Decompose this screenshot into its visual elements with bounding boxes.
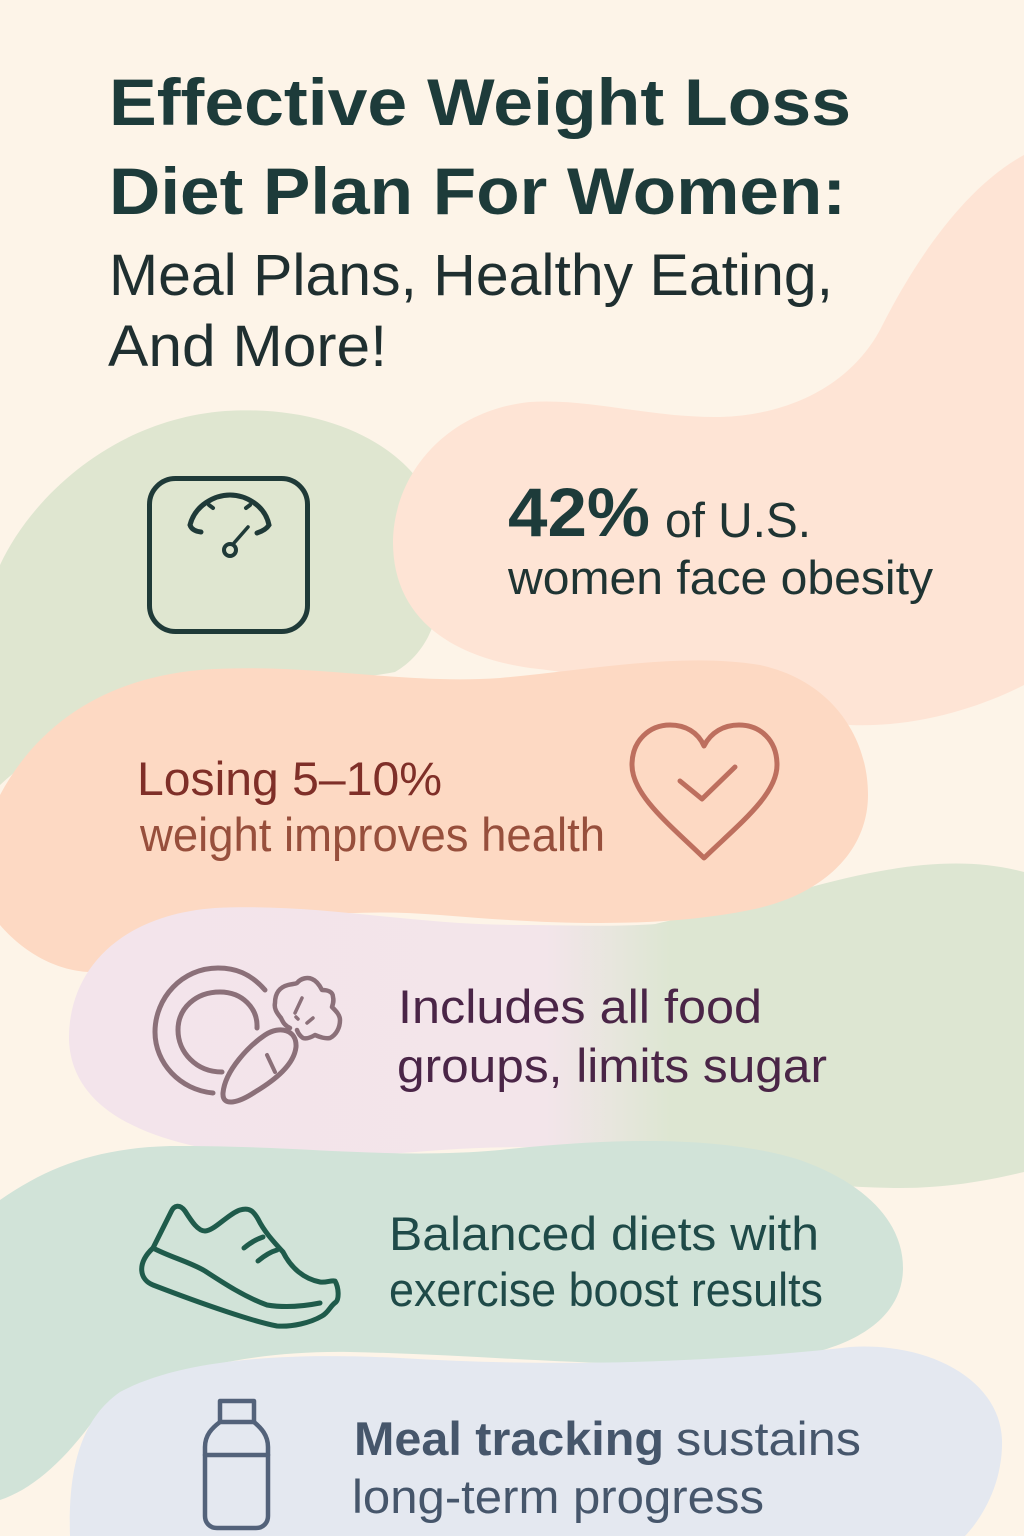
panel: food groups — [155, 968, 827, 1102]
icon: weighing scale — [150, 478, 308, 632]
statistic text: of U.S. — [665, 494, 811, 548]
icon: running shoe — [142, 1206, 338, 1326]
tracking text: long-term progress — [352, 1470, 764, 1523]
blob: green right middle — [560, 864, 1024, 1188]
exercise text — [389, 1207, 823, 1316]
blob: blue bottom — [70, 1347, 1002, 1536]
title — [109, 65, 851, 228]
benefit text: Losing 5–10% — [137, 752, 442, 805]
title: Diet Plan For Women: — [109, 154, 846, 228]
blob: peach band — [0, 660, 868, 972]
statistic text: 42% — [508, 474, 650, 551]
panel: balanced diet and exercise — [142, 1206, 823, 1326]
subtitle: And More! — [108, 314, 387, 379]
blob: green lower band — [0, 1141, 903, 1500]
blob: green behind scale — [0, 410, 441, 785]
panel: meal tracking — [205, 1401, 861, 1528]
benefit text — [137, 752, 605, 861]
tracking text — [352, 1412, 861, 1523]
exercise text: Balanced diets with — [389, 1207, 819, 1260]
exercise text: exercise boost results — [389, 1263, 823, 1316]
tracking text: sustains — [676, 1412, 861, 1465]
blob: lilac band — [69, 907, 700, 1162]
panel: weight loss benefit — [137, 725, 777, 861]
food text: groups, limits sugar — [397, 1039, 827, 1092]
title: Effective Weight Loss — [109, 65, 851, 139]
icon: plate with carrot and broccoli — [155, 968, 340, 1102]
icon: heart with check — [632, 725, 777, 858]
benefit text: weight improves health — [139, 808, 605, 861]
statistic text: women face obesity — [507, 551, 934, 604]
icon: bottle — [205, 1401, 268, 1528]
statistic text — [507, 474, 934, 604]
food text — [397, 980, 827, 1092]
subtitle: Meal Plans, Healthy Eating, — [109, 243, 833, 308]
tracking text: Meal tracking — [354, 1412, 664, 1465]
food text: Includes all food — [398, 980, 762, 1033]
subtitle — [108, 243, 833, 379]
blob: peach top right — [393, 155, 1024, 725]
panel: obesity statistic — [150, 474, 934, 632]
